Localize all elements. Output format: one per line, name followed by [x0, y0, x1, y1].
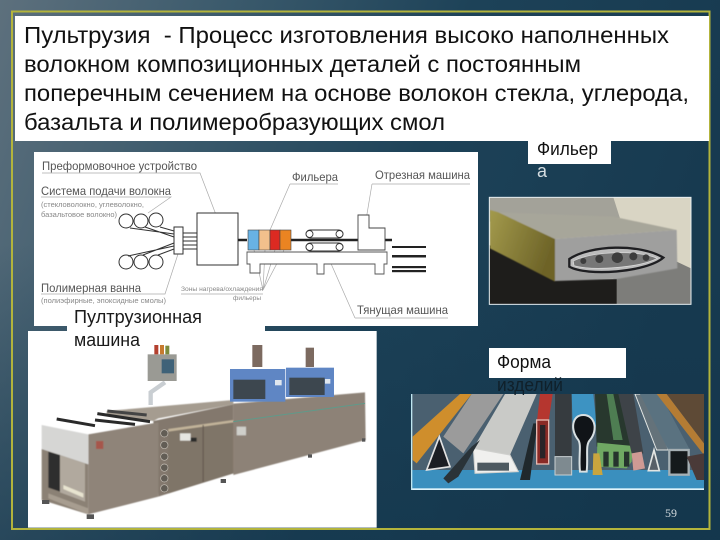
- title text block: базальта и полимеробразующих смол: [24, 109, 445, 135]
- label: product shapes: изделий: [497, 375, 563, 395]
- dark rod: [443, 440, 480, 483]
- square tube: [640, 394, 690, 450]
- label: die: а: [537, 161, 548, 181]
- panel: profile products photo: [411, 394, 704, 490]
- label: pultrusion machine: [67, 307, 265, 350]
- title text block: поперечным сечением на основе волокон стекла, углерода,: [24, 80, 689, 106]
- blue keyhole profile: [572, 394, 597, 427]
- label: pultrusion machine: машина: [74, 330, 141, 350]
- title text block: волокном композиционных деталей с постоянным: [24, 51, 581, 77]
- diagram labels: (стекловолокно, углеволокно,: [41, 202, 144, 209]
- title text block: [15, 16, 709, 141]
- machine body: [42, 392, 366, 514]
- blue heating units: [230, 345, 334, 402]
- label: product shapes: [489, 348, 626, 395]
- dark grey channel: [555, 394, 572, 456]
- diagram labels: Зоны нагрева/охлаждения: [181, 286, 263, 293]
- die block: [490, 210, 677, 282]
- die heating zones: [248, 230, 291, 250]
- panel: pultrusion process diagram: [34, 152, 478, 326]
- control arm: [151, 382, 165, 405]
- diagram labels: Тянущая машина: [357, 303, 448, 317]
- diagram labels: Преформовочное устройство: [42, 159, 197, 173]
- diagram labels: (полиэфирные, эпоксидные смолы): [41, 298, 166, 305]
- orange profile left: [413, 394, 472, 463]
- control box: [148, 345, 177, 381]
- panel: die photo: [489, 197, 691, 304]
- right brown profiles: [657, 394, 704, 455]
- page number: 59: [665, 506, 677, 520]
- label: product shapes: Форма: [497, 352, 552, 372]
- diagram labels: фильеры: [233, 295, 261, 302]
- green profile: [595, 394, 633, 447]
- die cavity: [569, 248, 663, 272]
- label: die: [528, 139, 611, 181]
- pulled profile line: [238, 239, 392, 241]
- diagram labels: Полимерная ванна: [41, 281, 141, 295]
- title text block: Пультрузия - Процесс изготовления высоко наполненных: [24, 22, 670, 48]
- red profile: [537, 394, 553, 420]
- machine bed: [247, 252, 387, 274]
- fibre bobbins and strands: [119, 213, 238, 269]
- diagram labels: Система подачи волокна: [41, 184, 171, 198]
- machine feet: [42, 438, 365, 519]
- pink profile: [618, 394, 643, 453]
- grey angle: [635, 394, 668, 450]
- diagram labels: базальтовое волокно): [41, 211, 117, 219]
- cutting machine: [358, 215, 385, 250]
- diagram labels: [41, 159, 470, 317]
- leader lines: [41, 173, 470, 318]
- puller rollers: [306, 230, 343, 251]
- rollers: [57, 411, 150, 426]
- yellow strip: [593, 453, 603, 475]
- finished profiles: [392, 246, 426, 272]
- panel: pultrusion machine photo: [28, 331, 377, 528]
- valves: [161, 430, 168, 492]
- label: die: Фильер: [537, 139, 598, 159]
- die holes: [580, 252, 649, 264]
- label: pultrusion machine: Пултрузионная: [74, 307, 202, 327]
- diagram labels: Фильера: [292, 170, 338, 184]
- green stripe: [233, 403, 365, 422]
- diagram labels: Отрезная машина: [375, 168, 470, 182]
